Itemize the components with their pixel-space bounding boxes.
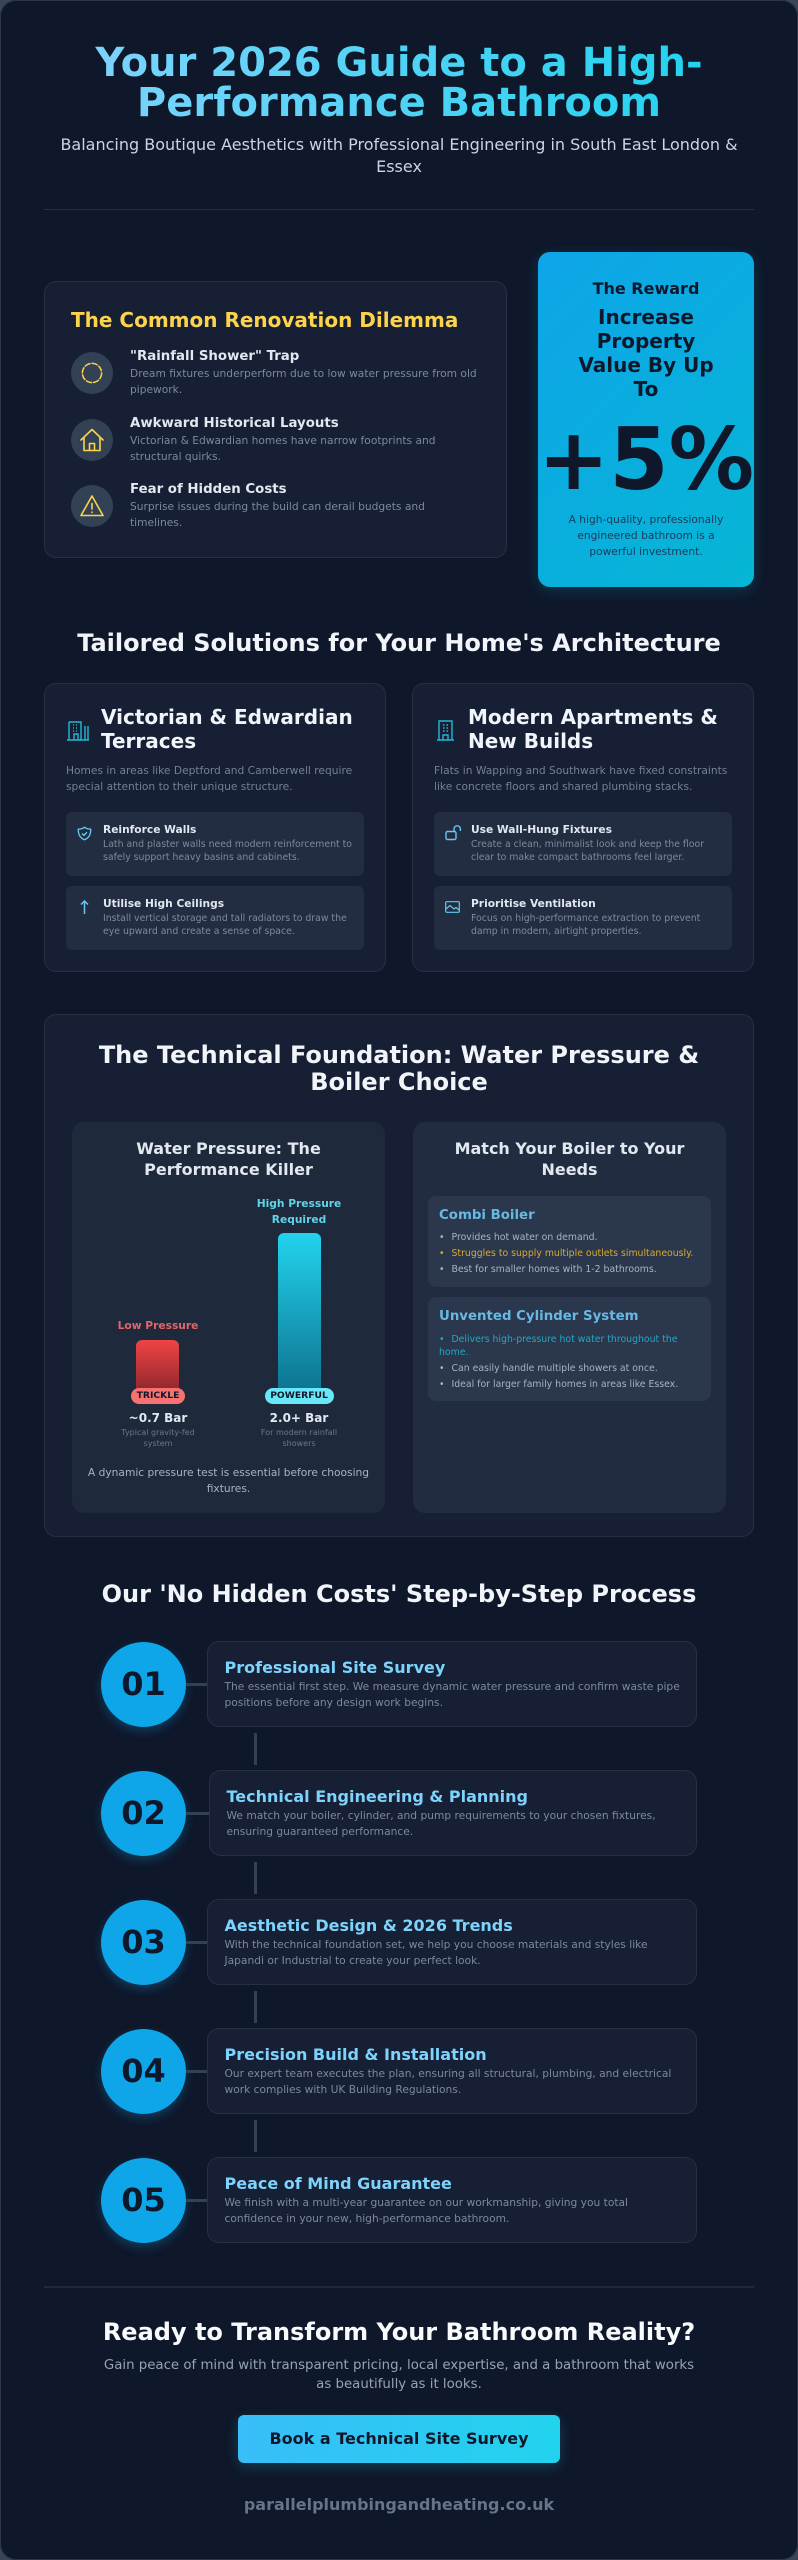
number	[101, 1642, 186, 1727]
button	[238, 2415, 560, 2463]
unvented list: •	[439, 1378, 445, 1390]
heading: water pressure	[136, 1138, 321, 1178]
heading: boiler	[455, 1138, 684, 1178]
card: combi boiler	[428, 1196, 711, 1287]
caption: Typical gravity-fed	[121, 1428, 195, 1437]
dilemma item: rainfall shower trap	[71, 349, 477, 396]
card title: Modern Apartments &	[468, 705, 718, 729]
text: Awkward Historical Layouts	[130, 416, 339, 430]
tip text: Utilise High Ceilings	[103, 897, 224, 910]
caption: showers	[282, 1439, 316, 1448]
panel: modern apartments and new builds	[412, 683, 754, 972]
icon: shield	[78, 826, 92, 840]
reward heading	[578, 305, 714, 401]
unvented list: Can easily handle multiple showers at once.	[452, 1362, 658, 1374]
caption: For modern rainfall	[261, 1428, 337, 1437]
step title: Technical Engineering & Planning	[226, 1787, 528, 1806]
dilemma item: awkward layouts: Victorian & Edwardian homes have narrow footprints and	[130, 434, 436, 446]
label: High Pressure	[257, 1197, 341, 1210]
step 3	[96, 1899, 697, 1994]
value: ~0.7 Bar	[129, 1411, 187, 1425]
tip: prioritise ventilation	[434, 886, 732, 950]
badge: powerful: POWERFUL	[270, 1390, 328, 1401]
panel: technical foundation	[44, 1014, 754, 1537]
card title: Victorian & Edwardian	[101, 705, 353, 729]
reward heading: To	[634, 377, 658, 401]
unvented list: Delivers high-pressure hot water throughout the	[452, 1334, 677, 1344]
tip: reinforce walls	[66, 812, 364, 876]
reward heading: Increase	[598, 305, 694, 329]
step 5	[96, 2157, 697, 2252]
tip: reinforce walls: safely support heavy basins and cabinets.	[103, 852, 300, 863]
card: unvented cylinder	[428, 1297, 711, 1401]
subtitle	[60, 135, 738, 176]
title	[90, 43, 708, 123]
card description: Homes in areas like Deptford and Camberwell require	[66, 764, 352, 777]
card title: Terraces	[101, 729, 196, 753]
tip: reinforce walls: Lath and plaster walls need modern reinforcement to	[103, 839, 352, 850]
icon: apartment building	[437, 720, 454, 741]
step text	[224, 1680, 680, 1709]
tip: prioritise ventilation: damp in modern, airtight properties.	[471, 926, 641, 937]
note: A dynamic pressure test is essential before choosing	[88, 1466, 369, 1478]
step text: positions before any design work begins.	[224, 1696, 443, 1709]
step 2	[96, 1770, 697, 1864]
step title: Aesthetic Design & 2026 Trends	[224, 1916, 513, 1935]
panel: water pressure	[72, 1122, 385, 1513]
title: Your 2026 Guide to a High-	[95, 40, 703, 86]
card title	[101, 705, 353, 753]
step text: The essential first step. We measure dynamic water pressure and confirm waste pipe	[224, 1680, 680, 1693]
badge: trickle	[131, 1388, 185, 1404]
icon: picture window	[445, 901, 460, 913]
icon: house	[71, 418, 113, 460]
cyan bar	[278, 1233, 321, 1391]
reward heading: Property	[597, 329, 695, 353]
step text: We finish with a multi-year guarantee on our workmanship, giving you total	[224, 2196, 628, 2209]
tip: wall-hung fixtures	[434, 812, 732, 876]
low pressure column	[118, 1319, 198, 1448]
icon: terrace building	[67, 721, 89, 741]
step 4	[96, 2028, 697, 2122]
step text	[224, 2067, 671, 2096]
tip: utilise high ceilings	[66, 886, 364, 950]
text: "Rainfall Shower" Trap	[130, 349, 299, 364]
caption: system	[144, 1439, 172, 1448]
heading: step-by-step process: Our 'No Hidden Costs' Step-by-Step Process	[102, 1580, 696, 1608]
caption	[121, 1428, 195, 1448]
tip: utilise high ceilings: Install vertical storage and tall radiators to draw the	[103, 913, 347, 924]
reward description: engineered bathroom is a	[577, 529, 715, 542]
combi list: Provides hot water on demand.	[452, 1232, 598, 1243]
red bar	[136, 1340, 179, 1390]
dilemma item: hidden costs	[71, 482, 425, 529]
tip: wall-hung fixtures: Create a clean, minimalist look and keep the floor	[471, 839, 704, 850]
step text: Japandi or Industrial to create your perfect look.	[224, 1954, 481, 1967]
unvented list: •	[439, 1362, 445, 1374]
dilemma item: rainfall shower trap: Dream fixtures underperform due to low water pressure from old	[130, 367, 477, 380]
number: 02	[121, 1794, 166, 1832]
number	[101, 1771, 186, 1856]
note	[88, 1466, 369, 1494]
panel: boiler choice	[413, 1122, 726, 1513]
title: Performance Bathroom	[137, 80, 661, 126]
icon: open lock	[445, 825, 462, 840]
heading: technical foundation	[99, 1040, 699, 1096]
panel: the common renovation dilemma	[44, 281, 507, 558]
combi list: •	[439, 1248, 445, 1259]
number	[101, 2029, 186, 2114]
tip text: Prioritise Ventilation	[471, 897, 596, 910]
card title	[468, 705, 718, 753]
tip text: Reinforce Walls	[103, 823, 196, 836]
card description	[434, 764, 727, 793]
step card	[207, 2028, 697, 2114]
unvented list: •	[439, 1334, 445, 1344]
heading: boiler: Needs	[541, 1160, 598, 1178]
step text: With the technical foundation set, we help you choose materials and styles like	[224, 1938, 648, 1951]
step text: confidence in your new, high-performance bathroom.	[224, 2212, 509, 2225]
step title: Professional Site Survey	[224, 1658, 445, 1677]
tip: prioritise ventilation: Focus on high-performance extraction to prevent	[471, 913, 700, 924]
reward label: The Reward	[593, 279, 699, 298]
combi list	[439, 1232, 693, 1275]
reward description: powerful investment.	[589, 545, 703, 558]
tip text: Use Wall-Hung Fixtures	[471, 823, 612, 836]
number: 03	[121, 1923, 166, 1961]
step 1	[96, 1641, 697, 1736]
high pressure column	[257, 1197, 341, 1448]
unvented list: Ideal for larger family homes in areas like Essex.	[452, 1378, 678, 1390]
step text: ensuring guaranteed performance.	[226, 1825, 413, 1838]
unvented list	[439, 1334, 678, 1390]
unvented list: home.	[439, 1346, 468, 1358]
card description: special attention to their unique structure.	[66, 780, 293, 793]
step text: We match your boiler, cylinder, and pump requirements to your chosen fixtures,	[226, 1809, 656, 1822]
tip: wall-hung fixtures: clear to make compact bathrooms feel larger.	[471, 852, 684, 863]
tip: utilise high ceilings: eye upward and create a sense of space.	[103, 926, 295, 937]
dilemma item: hidden costs: Surprise issues during the build can derail budgets and	[130, 500, 425, 513]
cta text	[101, 2357, 697, 2394]
dilemma item: awkward layouts: structural quirks.	[130, 450, 221, 462]
value: 2.0+ Bar	[270, 1411, 328, 1425]
reward description	[568, 513, 723, 558]
step text	[224, 2196, 628, 2225]
big number: +5%	[538, 410, 754, 510]
number: 04	[121, 2052, 166, 2090]
panel: victorian and edwardian terraces	[44, 683, 386, 972]
heading: dilemma: The Common Renovation Dilemma	[71, 308, 458, 332]
card description: Flats in Wapping and Southwark have fixed constraints	[434, 764, 727, 777]
step card	[209, 1770, 697, 1856]
label: Low Pressure	[118, 1319, 198, 1332]
reward heading: Value By Up	[578, 353, 714, 377]
step card	[207, 2157, 697, 2243]
text: Fear of Hidden Costs	[130, 482, 287, 497]
cta text: as beautifully as it looks.	[316, 2376, 482, 2392]
icon: up arrow	[80, 900, 88, 914]
subtitle: Balancing Boutique Aesthetics with Professional Engineering in South East London &	[60, 135, 738, 154]
label: Required	[272, 1213, 326, 1226]
heading: water pressure: Performance Killer	[144, 1160, 313, 1178]
cta heading: Ready to Transform Your Bathroom Reality?	[103, 2318, 695, 2346]
step title: Peace of Mind Guarantee	[224, 2174, 452, 2193]
subtitle: Essex	[376, 156, 422, 176]
icon: warning	[71, 485, 113, 527]
badge: trickle: TRICKLE	[137, 1390, 179, 1401]
card title: New Builds	[468, 729, 593, 753]
header	[60, 40, 738, 176]
card description: like concrete floors and shared plumbing stacks.	[434, 780, 692, 793]
card description	[66, 764, 352, 793]
cta text: Gain peace of mind with transparent pricing, local expertise, and a bathroom that works	[104, 2358, 694, 2373]
combi list: •	[439, 1232, 445, 1243]
step card	[207, 1899, 697, 1985]
button: Book a Technical Site Survey	[269, 2429, 529, 2448]
heading: technical foundation: Boiler Choice	[310, 1068, 488, 1096]
dilemma item: hidden costs: timelines.	[130, 516, 182, 529]
heading: technical foundation: The Technical Foundation: Water Pressure &	[99, 1040, 699, 1068]
step title: Precision Build & Installation	[224, 2045, 487, 2064]
icon: shower circle	[71, 352, 113, 394]
heading: tailored solutions: Tailored Solutions for Your Home's Architecture	[77, 629, 721, 657]
dilemma item: awkward layouts	[71, 416, 436, 462]
note: fixtures.	[207, 1482, 250, 1494]
website: parallelplumbingandheating.co.uk	[244, 2495, 554, 2514]
reward description: A high-quality, professionally	[569, 513, 723, 526]
number: 01	[121, 1665, 166, 1703]
panel: the reward	[538, 252, 754, 587]
number: 05	[121, 2181, 166, 2219]
combi list: Best for smaller homes with 1-2 bathrooms.	[452, 1264, 657, 1275]
heading: boiler: Match Your Boiler to Your	[455, 1138, 684, 1158]
bar chart: water pressure comparison	[118, 1197, 341, 1448]
number	[101, 2158, 186, 2243]
caption	[261, 1428, 337, 1448]
step text	[224, 1938, 648, 1967]
step card	[207, 1641, 697, 1727]
combi list: •	[439, 1264, 445, 1275]
step text: Our expert team executes the plan, ensuring all structural, plumbing, and electrical	[224, 2067, 671, 2080]
label	[257, 1197, 341, 1226]
combi list: Struggles to supply multiple outlets simultaneously.	[452, 1248, 693, 1259]
combi title: Combi Boiler	[439, 1208, 535, 1223]
badge: powerful	[264, 1388, 334, 1404]
step text: work complies with UK Building Regulations.	[224, 2083, 461, 2096]
step text	[226, 1809, 656, 1838]
heading: water pressure: Water Pressure: The	[136, 1138, 321, 1158]
unvented title: Unvented Cylinder System	[439, 1309, 639, 1324]
number	[101, 1900, 186, 1985]
call to action	[103, 2318, 695, 2514]
dilemma item: rainfall shower trap: pipework.	[130, 383, 182, 396]
